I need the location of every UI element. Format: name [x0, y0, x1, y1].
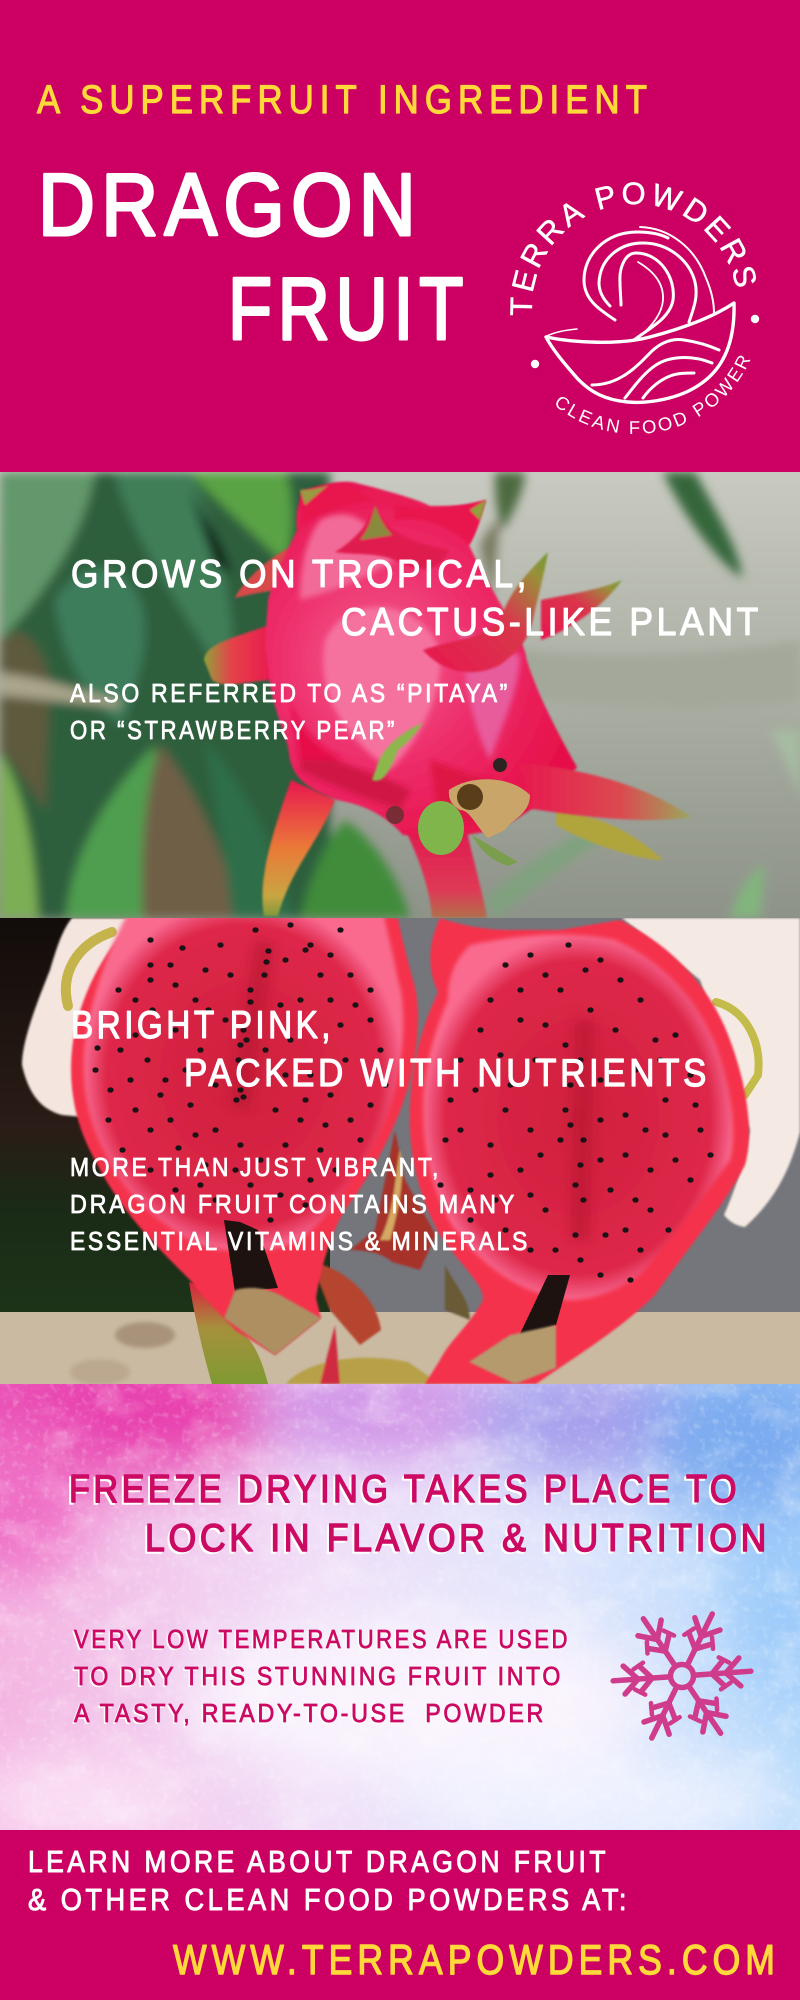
body text: freeze drying explanation: [72, 1624, 570, 1730]
heading: cactus-like plant: CACTUS-LIKE PLANT: [341, 601, 762, 644]
title: dragon: DRAGON: [38, 155, 422, 254]
body text: more than just vibrant: MORE THAN JUST VIBRANT,: [70, 1152, 441, 1182]
right glove: [622, 918, 800, 1227]
photo: halved dragon fruit in gloved hands: [0, 900, 800, 1385]
logo dots: [531, 315, 759, 368]
footer text: learn more: LEARN MORE ABOUT DRAGON FRUIT: [28, 1844, 609, 1879]
heading: bright pink: BRIGHT PINK,: [71, 1004, 334, 1047]
photo: dragon fruit on plant: [0, 472, 800, 918]
panel: bright pink packed with nutrients: [0, 900, 800, 1385]
panel: grows on tropical plant: [0, 472, 800, 918]
body text: essential vitamins and minerals: ESSENTIAL VITAMINS & MINERALS: [70, 1226, 530, 1256]
body text: freeze drying explanation: TO DRY THIS STUNNING FRUIT INTO: [74, 1661, 563, 1691]
left fruit half skin: [71, 918, 418, 1355]
left fruit flesh: [84, 900, 403, 1251]
peel strips: [66, 932, 112, 1006]
panel: header band: [36, 78, 760, 434]
body text: freeze drying explanation: VERY LOW TEMPERATURES ARE USED: [72, 1626, 568, 1656]
left stem: [189, 1282, 268, 1384]
fruit bracts in front: [300, 485, 691, 820]
body text: strawberry pear: OR “STRAWBERRY PEAR”: [70, 715, 397, 745]
logo wordmark: terra powders: TERRA POWDERS: [510, 182, 756, 316]
left glove: [20, 918, 128, 1118]
logo icon: bowl with wave: [546, 227, 734, 402]
blurred leaves background: [0, 472, 800, 918]
table surface: [0, 1312, 800, 1384]
fruit highlights: [290, 514, 520, 825]
body text: also referred: ALSO REFERRED TO AS “PITAYA”: [70, 678, 510, 708]
fruit body: [265, 482, 577, 835]
subtitle: a superfruit ingredient: A SUPERFRUIT INGREDIENT: [37, 78, 653, 122]
right fruit half skin: [410, 918, 749, 1384]
photo: icy pink to blue background: [0, 1384, 800, 1830]
body text: freeze drying explanation: VERY LOW TEMPERATURES ARE USED: [74, 1624, 570, 1654]
heading: grows on tropical: GROWS ON TROPICAL,: [71, 553, 530, 596]
heading: packed with nutrients: PACKED WITH NUTRIENTS: [184, 1052, 710, 1095]
right fruit core: [518, 1275, 570, 1338]
left fruit husk: [224, 1288, 321, 1355]
body text: freeze drying explanation: TO DRY THIS STUNNING FRUIT INTO: [72, 1662, 562, 1692]
right fruit husk: [469, 1325, 556, 1384]
logo: terra powders badge: [510, 182, 760, 434]
body text: dragon fruit contains many: DRAGON FRUIT CONTAINS MANY: [70, 1189, 517, 1219]
centre stem and petals: [286, 1130, 470, 1384]
footer text: other powders: & OTHER CLEAN FOOD POWDERS AT:: [28, 1882, 630, 1917]
icon: snowflake: [608, 1604, 756, 1748]
body text: freeze drying explanation: A TASTY, READY-TO-USE POWDER: [72, 1700, 544, 1730]
flesh dark streaks: [230, 940, 595, 1240]
right fruit flesh: [423, 935, 733, 1300]
panel: freeze drying: [0, 1384, 800, 1830]
title: fruit: FRUIT: [228, 259, 469, 358]
ice texture: [0, 1384, 800, 1830]
seeds: [95, 925, 711, 1280]
logo tagline: clean food power: CLEAN FOOD POWER: [556, 356, 750, 434]
fruit bracts behind body: [204, 545, 663, 918]
dried flower husk: [449, 758, 530, 838]
body text: freeze drying explanation: A TASTY, READY-TO-USE POWDER: [74, 1698, 546, 1728]
green bud: [418, 801, 464, 855]
left fruit core: [224, 1220, 278, 1292]
grey backdrop: [330, 918, 800, 1318]
panel: footer call to action: [0, 1830, 800, 2000]
